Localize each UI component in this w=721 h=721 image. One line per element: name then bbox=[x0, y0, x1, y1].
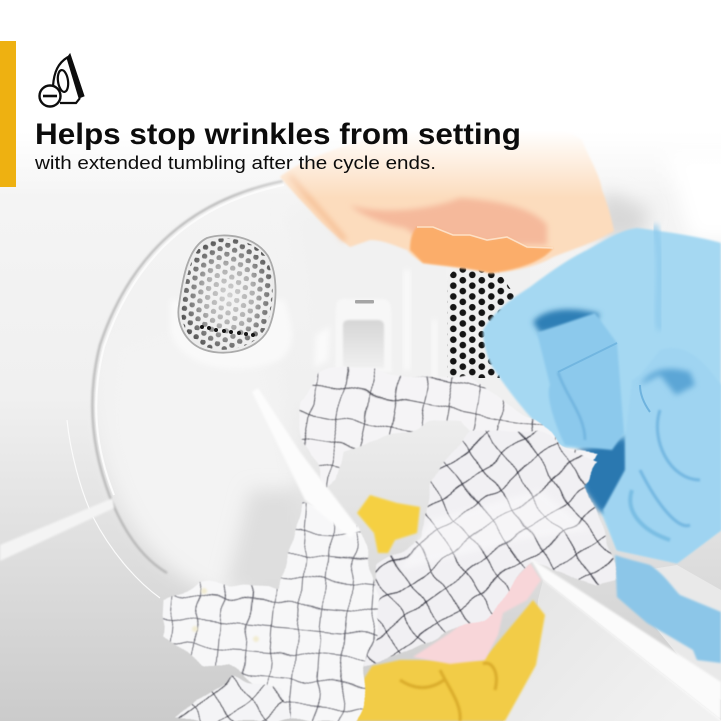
paddle top edge bbox=[530, 558, 721, 721]
lint screen mount bbox=[170, 300, 292, 369]
title: Helps stop wrinkles from setting bbox=[35, 118, 521, 151]
yellow accent bar bbox=[0, 41, 16, 187]
right perforated vent bbox=[447, 262, 530, 378]
right checked shirt bbox=[367, 431, 613, 667]
pink garment bbox=[413, 563, 541, 664]
blue garment lower piece bbox=[615, 555, 721, 663]
moisture sensor housing bbox=[314, 270, 437, 380]
white baffle streak left bbox=[0, 498, 114, 561]
white paddle face bbox=[503, 580, 721, 721]
drum rim arc bbox=[67, 181, 284, 598]
small yellow garment bbox=[357, 495, 420, 553]
lower sleeve bbox=[173, 677, 290, 721]
bottom yellow garment bbox=[355, 600, 545, 721]
shirt buttons bbox=[192, 588, 259, 642]
orange garment bbox=[280, 122, 614, 273]
upper checked shirt bbox=[300, 368, 598, 490]
perforated oval vent bbox=[178, 235, 276, 353]
shirt folds highlight bbox=[400, 490, 590, 570]
blue garment bbox=[483, 225, 721, 663]
subtitle: with extended tumbling after the cycle ends. bbox=[34, 152, 436, 173]
top white fade bbox=[0, 0, 721, 198]
white shirt placket streak bbox=[252, 388, 360, 538]
left checked shirt bbox=[162, 503, 383, 721]
icon: iron with minus sign bbox=[40, 54, 84, 106]
